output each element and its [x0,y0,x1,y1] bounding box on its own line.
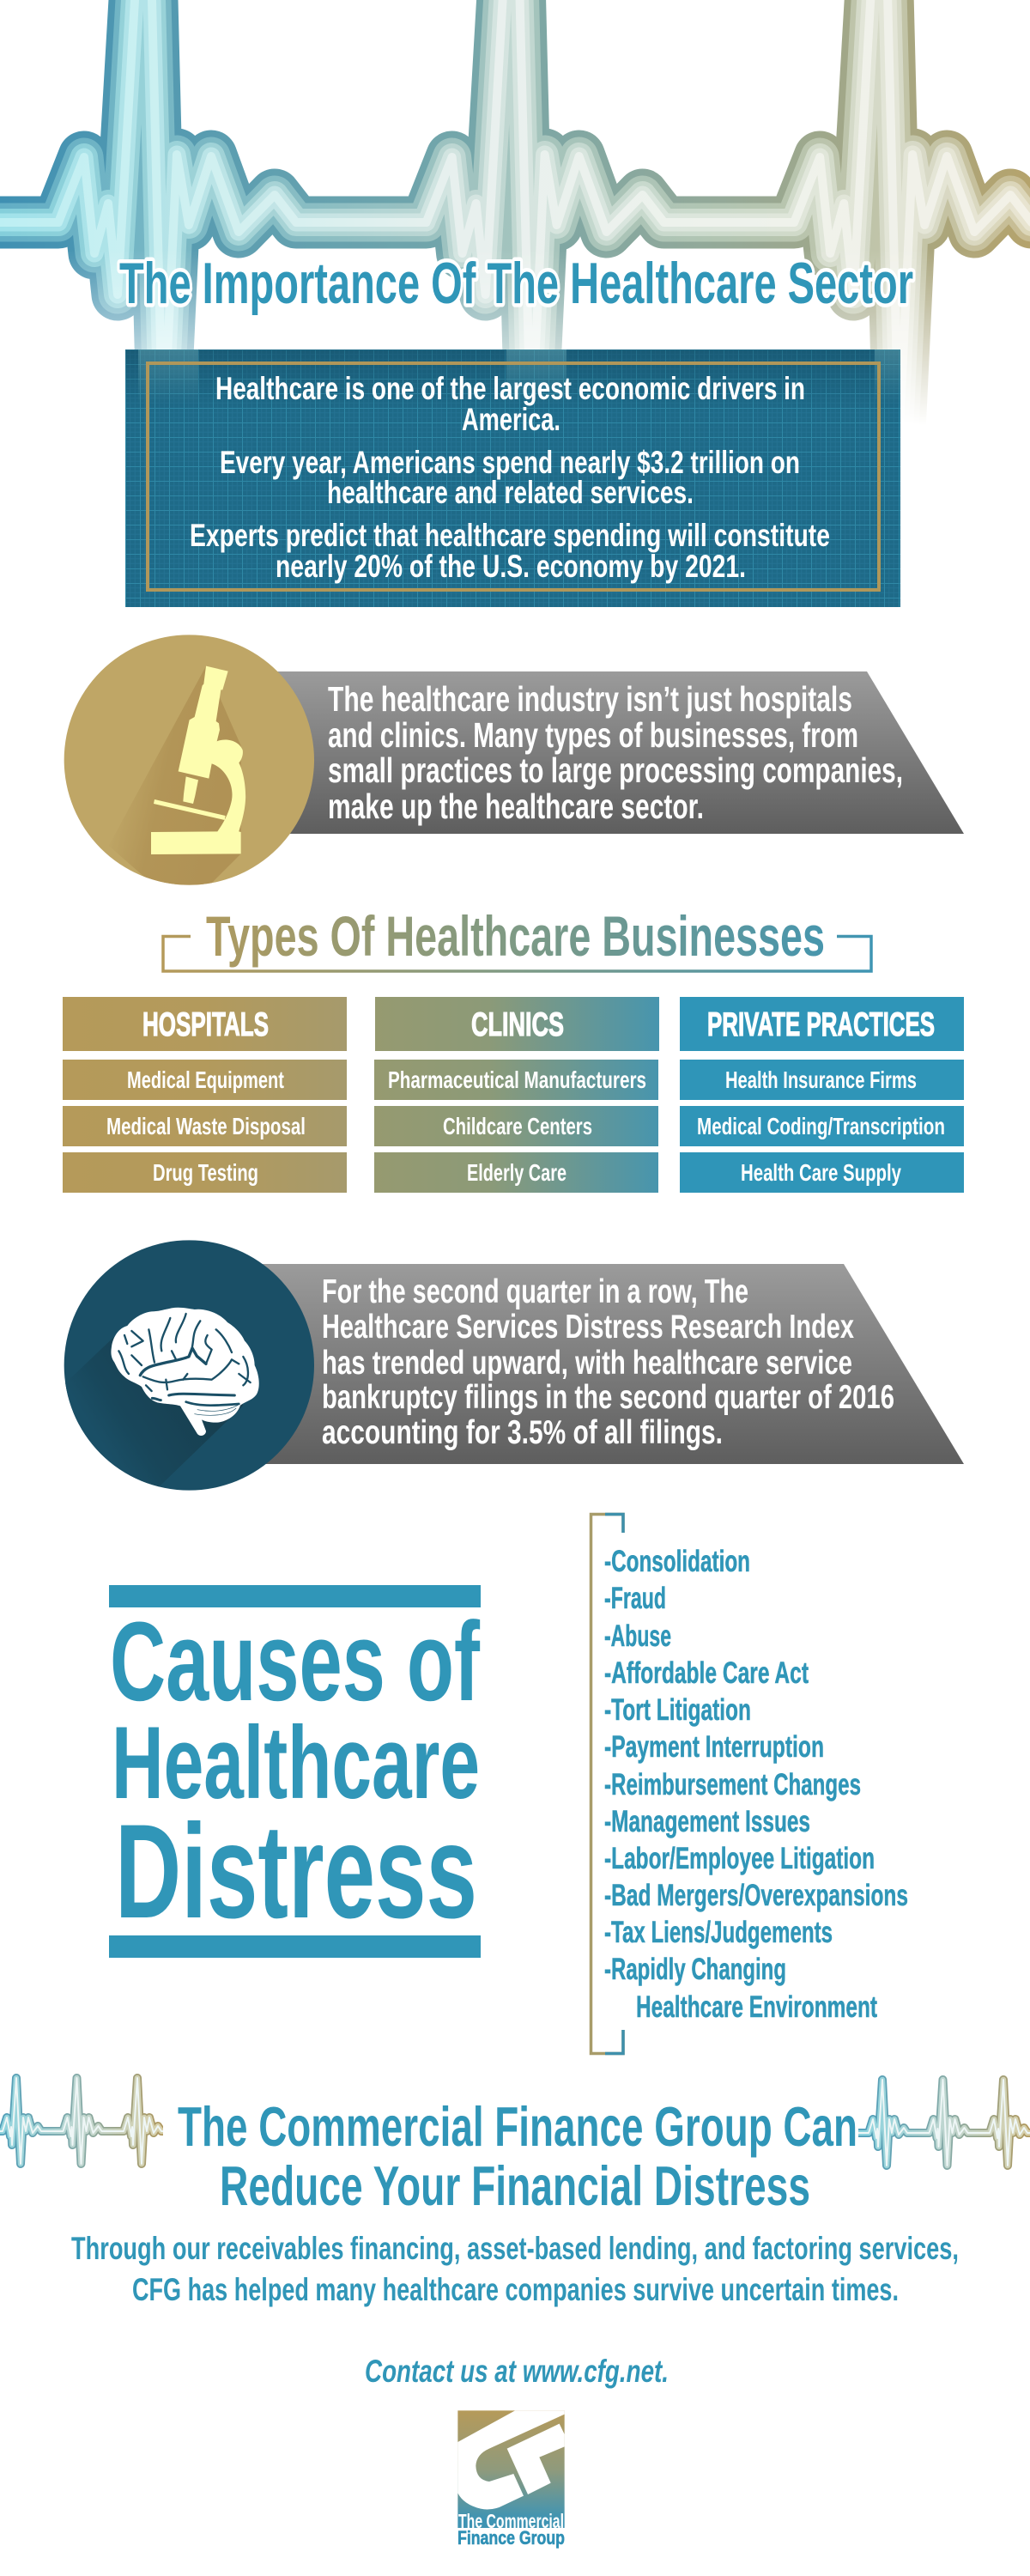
text block: economic facts: Healthcare is one of the largest economic drivers in [215,371,805,406]
heading: causes of healthcare distress [109,1585,481,1958]
list: causes with bracket: -Bad Mergers/Overexpansions [604,1879,908,1912]
list: causes with bracket: -Labor/Employee Litigation [604,1842,875,1875]
icon: brain in navy circle [60,1240,314,1492]
list: causes with bracket: -Reimbursement Changes [604,1768,861,1801]
panel: private practices column: Health Care Supply [741,1159,901,1186]
text block: distress index: For the second quarter in a row, The [322,1273,748,1310]
text block: economic facts [190,371,830,584]
list: causes with bracket: -Abuse [604,1619,671,1653]
text block: distress index: has trended upward, with healthcare service [322,1345,852,1382]
heading: causes of healthcare distress: Distress [115,1797,477,1947]
list: causes with bracket: -Tort Litigation [604,1693,751,1727]
heading: commercial finance group: Reduce Your Financial Distress [220,2154,810,2217]
heading: causes of healthcare distress: Causes of [110,1598,480,1724]
heartbeat line banner [0,0,1030,447]
panel: hospitals column: Medical Equipment [127,1066,284,1093]
panel: clinics column: CLINICS [471,1006,564,1043]
logo: the commercial finance group: Finance Group [457,2527,565,2549]
panel: private practices column: Health Insurance Firms [725,1066,917,1093]
icon: small heartbeat line left [0,2078,165,2164]
heading: causes of healthcare distress: Healthcare [112,1705,480,1820]
text block: distress index: Healthcare Services Distress Research Index [322,1309,854,1346]
panel: private practices column: Medical Coding/Transcription [697,1113,945,1139]
list: causes with bracket: -Rapidly Changing [604,1953,786,1986]
panel: private practices column [680,997,964,1193]
panel: clinics column [374,997,659,1193]
list: causes with bracket: Healthcare Environment [636,1990,877,2024]
text block: financing services [71,2231,959,2307]
list: causes with bracket: -Fraud [604,1582,666,1615]
text block: economic facts: Every year, Americans spend nearly $3.2 trillion on [220,445,800,480]
list: causes with bracket: -Affordable Care Act [604,1656,809,1690]
panel: hospitals column [63,997,347,1193]
list: causes with bracket [591,1515,908,2054]
list: causes with bracket: -Management Issues [604,1805,810,1838]
list: causes with bracket: -Consolidation [604,1545,750,1578]
list: causes with bracket: -Payment Interruption [604,1730,824,1764]
panel: hospitals column: HOSPITALS [142,1006,269,1043]
text block: distress index: accounting for 3.5% of all filings. [322,1414,723,1451]
text block: economic facts: America. [462,402,560,437]
icon: small heartbeat line right [849,2080,1030,2166]
panel: hospitals column: Drug Testing [153,1159,258,1186]
panel: clinics column: Childcare Centers [443,1113,592,1139]
text block: industry description [328,679,903,826]
text block: economic facts: nearly 20% of the U.S. economy by 2021. [276,549,746,584]
contact line: Contact us at www.cfg.net. [365,2354,669,2389]
text block: industry description: make up the healthcare sector. [328,787,704,826]
text block: industry description: The healthcare industry isn’t just hospitals [328,679,852,719]
heading: commercial finance group [178,2095,857,2217]
callout: healthcare industry [64,635,964,886]
icon: microscope in gold circle [64,635,314,886]
panel: clinics column: Pharmaceutical Manufacturers [388,1066,646,1093]
text block: economic facts: healthcare and related services. [327,475,694,510]
text block: distress index [322,1273,894,1451]
panel: clinics column: Elderly Care [467,1159,566,1186]
callout: distress index [60,1240,964,1492]
panel: healthcare economic facts [125,349,900,607]
text block: economic facts: Experts predict that healthcare spending will constitute [190,518,830,553]
logo: the commercial finance group: The Commercial [458,2510,564,2532]
logo: the commercial finance group [457,2410,565,2549]
panel: hospitals column: Medical Waste Disposal [106,1113,306,1139]
list: causes with bracket: -Tax Liens/Judgements [604,1916,833,1949]
